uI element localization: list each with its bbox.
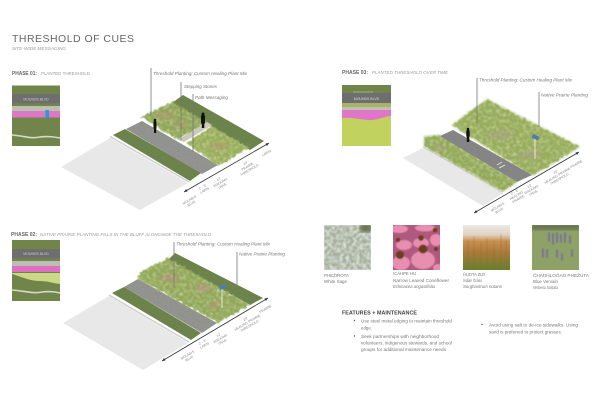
panel: phase 02	[11, 232, 285, 370]
panel: plant palette	[324, 224, 589, 290]
path sign	[218, 283, 226, 308]
dimension axis: 12'	[527, 183, 532, 189]
people	[154, 112, 205, 133]
bullet: de-icing: Avoid using salt to de-ice sidewalks. Using	[489, 322, 579, 328]
road	[63, 296, 188, 370]
leader lines and labels: Stepping Stones	[184, 84, 218, 89]
leader lines and labels: Path Messaging	[195, 95, 228, 100]
dimension axis: THRESHOLD	[549, 172, 570, 186]
bullet: steel edging: edge.	[361, 326, 372, 330]
phase 01 isometric diagram	[61, 68, 272, 210]
dimension axis: TRAIL	[217, 182, 228, 190]
plant: indian grass	[463, 225, 510, 289]
dimension axis: TRAIL	[528, 189, 539, 197]
phase 03 isometric diagram	[403, 78, 588, 216]
dimension axis: PRAIRIE	[259, 304, 273, 314]
pink flower haze	[156, 111, 227, 150]
back lawn	[172, 95, 264, 150]
phase 02 heading: NATIVE PRAIRIE PLANTING FILLS IN THE BLUFF ALONGSIDE THE THRESHOLD	[40, 232, 211, 238]
leader lines and labels: Native Prairie Planting	[541, 92, 588, 98]
phase 01 plan thumbnail	[12, 86, 60, 146]
trail marking	[497, 162, 505, 168]
plant: narrow leaved coneflower: Echinacea angustifolia	[393, 284, 436, 289]
walking trail	[124, 279, 217, 333]
bullet: partnerships: Seek partnerships with neighborhood	[361, 334, 440, 339]
panel: phase 03	[342, 70, 588, 216]
dimension axis: PRAIRIE	[241, 161, 255, 172]
front lawn	[112, 287, 201, 340]
phase 03 plan thumbnail: MOUNDS BLVD	[354, 97, 380, 101]
bullet: steel edging	[354, 318, 453, 330]
plant: indian grass: Sorghastrum nutans	[463, 284, 503, 289]
leader lines and labels: Threshold Planting: Custom Healing Plant Mix	[479, 78, 573, 82]
bullet: partnerships	[354, 334, 452, 352]
leader lines and labels	[151, 68, 248, 152]
muted flower haze	[432, 130, 542, 160]
phase 02 plan thumbnail: MOUNDS BLVD	[23, 252, 49, 256]
phase 02 heading: PHASE 02:	[11, 232, 37, 238]
phase 03 heading: PHASE 03:	[342, 70, 368, 76]
dimension axis: WALKING	[213, 333, 229, 344]
bullet: steel edging: Use steel metal edging to maintain threshold	[361, 318, 453, 324]
phase 01 plan thumbnail: MOUNDS BLVD	[23, 98, 49, 102]
back lawn	[168, 253, 263, 305]
dimension axis: BLVD	[185, 354, 195, 362]
planting halo	[424, 99, 580, 192]
subtitle: SITE-WIDE MESSAGING	[12, 46, 66, 52]
phase 01 heading: PHASE 01:	[12, 71, 37, 77]
plant: narrow leaved coneflower: ICÁHPE HU	[393, 271, 416, 276]
dimension axis: 2' - 8'	[198, 338, 207, 346]
road	[61, 138, 188, 210]
dimension axis: WALKING	[524, 184, 540, 195]
phase 01 heading: PLANTED THRESHOLD	[41, 71, 90, 77]
plant: blue vervain: ČHAŊȞLOĞAŊ PHEŽÚTA	[533, 273, 589, 278]
dimension axis: HEALING	[509, 190, 524, 201]
plant: indian grass: Indian Grass	[463, 278, 482, 283]
front planting	[424, 136, 517, 191]
dimension axis: LAWN	[199, 341, 210, 350]
plant: blue vervain: Blue Vervain	[533, 279, 559, 284]
plant: blue vervain	[531, 224, 589, 290]
pink flower haze	[161, 274, 222, 308]
dimension axis: PRAIRIE	[570, 159, 584, 169]
dimension axis	[182, 143, 272, 209]
features heading: FEATURES + MAINTENANCE	[342, 310, 418, 316]
bullet: de-icing	[481, 322, 579, 334]
dimension axis: 12'	[216, 332, 221, 338]
path sign	[531, 134, 539, 159]
title: THRESHOLD OF CUES	[12, 33, 134, 45]
plant: white sage: White Sage	[324, 279, 348, 284]
front lawn	[113, 129, 201, 181]
phase 03 heading	[342, 70, 449, 76]
threshold planting	[138, 258, 250, 323]
plant: white sage: PHEŽIŘOTA	[324, 273, 349, 278]
dimension axis: HEALING PRAIRIE	[544, 166, 572, 185]
dimension axis: 2' - 8'	[510, 188, 519, 196]
plant: blue vervain: Verbena hastata	[533, 285, 558, 290]
phase 02 heading	[11, 232, 211, 238]
leader lines and labels	[477, 78, 588, 127]
plant: narrow leaved coneflower: Narrow Leaved Coneflower	[393, 278, 450, 283]
dimension axis: BLVD	[187, 199, 197, 207]
leader lines and labels	[174, 242, 285, 288]
dimension axis: PRAIRIE	[512, 194, 526, 204]
dimension axis: TRAIL	[217, 338, 228, 346]
walking trail	[440, 130, 532, 182]
dimension axis: BLVD	[495, 206, 505, 214]
planted threshold east	[186, 126, 249, 166]
dimension axis: THRESHOLD	[239, 163, 260, 177]
leader lines and labels: Threshold Planting: Custom Healing Plant Mix	[153, 71, 248, 76]
leader lines and labels: Threshold Planting: Custom Healing Plant Mix	[176, 242, 271, 246]
dimension axis: MOUNDS	[180, 350, 195, 361]
dimension axis: HEALING PRAIRIE	[234, 313, 262, 332]
bullet: partnerships: volunteers, indigenous stewards, and school	[361, 340, 452, 346]
dimension axis: 2' - 8'	[198, 183, 207, 191]
phase 02 plan thumbnail	[12, 240, 60, 301]
dimension axis: 12'	[216, 176, 221, 182]
plant: white sage	[324, 224, 372, 284]
phase 01 heading	[12, 71, 90, 77]
road	[403, 148, 503, 206]
phase 03 heading: PLANTED THRESHOLD OVER TIME	[372, 70, 449, 76]
back planting	[452, 100, 579, 175]
dimension axis: LAWN	[261, 149, 272, 157]
dimension axis: MOUNDS	[182, 195, 197, 206]
bullet: partnerships: groups for additional maintenance needs	[361, 347, 447, 352]
panel: phase 01	[12, 68, 272, 210]
plant: narrow leaved coneflower	[390, 224, 450, 289]
plant: indian grass: ȞUŊTA ZIZI	[463, 272, 485, 277]
walking trail	[126, 121, 218, 174]
phase 02 isometric diagram	[63, 242, 285, 370]
dimension axis: 20'	[243, 160, 248, 166]
phase 03 plan thumbnail	[342, 85, 391, 146]
dimension axis: MOUNDS	[490, 202, 505, 213]
person	[466, 128, 470, 142]
dimension axis: THRESHOLD	[239, 319, 260, 333]
dimension axis: 20'	[243, 316, 248, 322]
planted threshold west	[141, 102, 207, 140]
panel: features and maintenance	[342, 310, 579, 352]
dimension axis	[162, 298, 273, 364]
dimension axis: WALKING	[213, 177, 229, 188]
dimension axis: 20'	[553, 169, 558, 175]
dimension axis: LAWN	[199, 186, 210, 195]
stepping stones	[178, 122, 212, 142]
dimension axis	[474, 152, 584, 216]
leader lines and labels: Native Prairie Planting	[239, 252, 285, 256]
bullet: de-icing: sand is preferred to protect grasses.	[489, 330, 562, 334]
